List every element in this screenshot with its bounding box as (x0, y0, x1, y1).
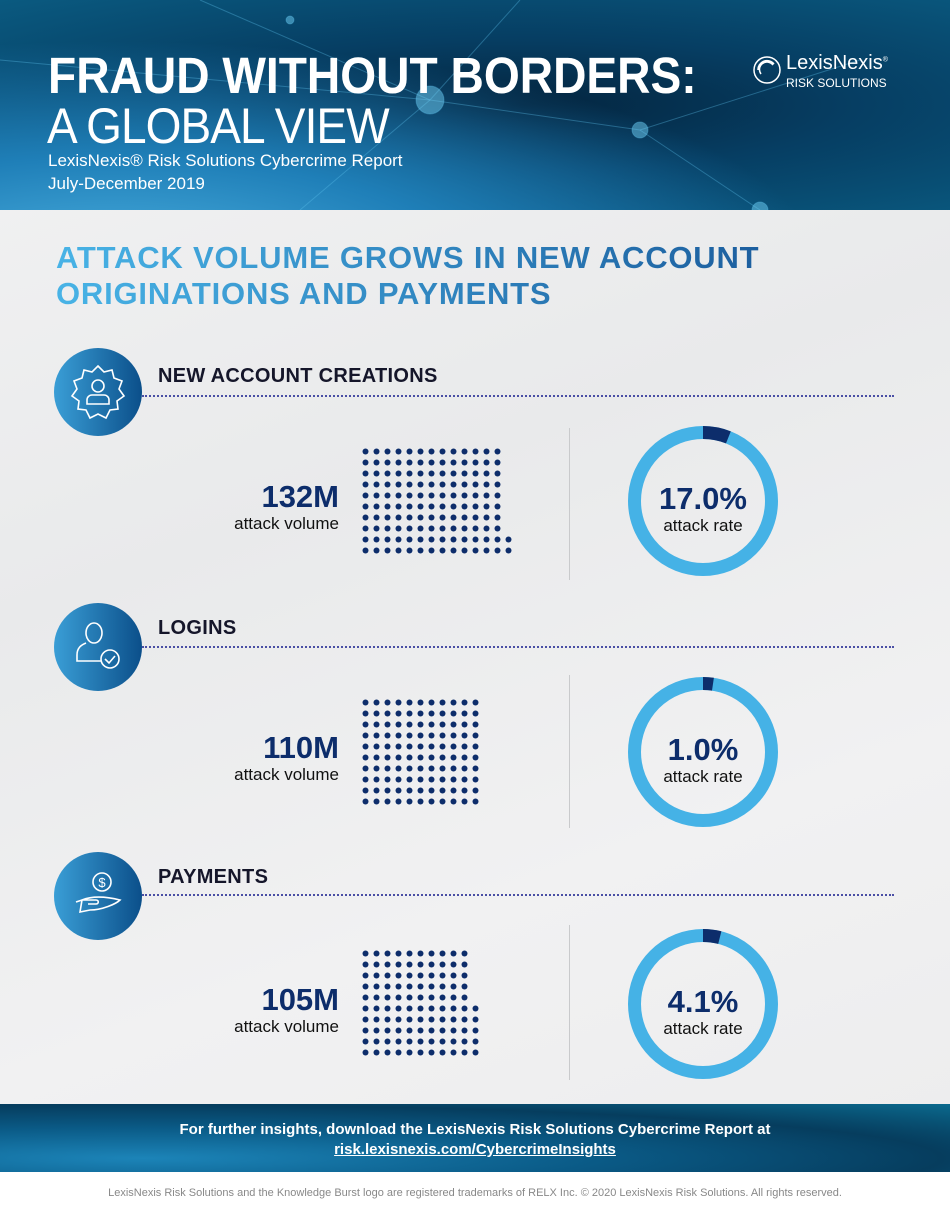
copyright: LexisNexis Risk Solutions and the Knowledge Burst logo are registered trademarks of RELX Inc. © 2020 LexisNexis Risk Solutions. All rights reserved. (108, 1187, 842, 1199)
report info: July-December 2019 (48, 174, 205, 193)
rate 1.0%: 1.0% (668, 732, 738, 767)
rate 17.0%: 17.0% (659, 481, 747, 516)
stat: 105M (234, 982, 339, 1036)
report info: LexisNexis® Risk Solutions Cybercrime Report (48, 151, 403, 170)
icon: new account (54, 348, 142, 436)
header banner (0, 0, 950, 210)
rate 4.1% (663, 984, 743, 1038)
rate 17.0% (659, 481, 747, 535)
dot grid 3 (362, 950, 478, 1056)
rate 17.0%: attack rate (663, 516, 743, 535)
subtitle: A GLOBAL VIEW (47, 98, 389, 154)
rate 4.1%: 4.1% (668, 984, 738, 1019)
heading: new account creations: NEW ACCOUNT CREATIONS (158, 365, 438, 387)
logo: RISK SOLUTIONS (786, 76, 887, 90)
footer banner (0, 1104, 950, 1172)
logo: LexisNexis® (786, 52, 888, 74)
stat: 132M: attack volume (234, 514, 339, 533)
title: FRAUD WITHOUT BORDERS: (48, 47, 697, 104)
ring 1 (628, 426, 778, 576)
dot grid 2 (362, 700, 478, 804)
copyright (0, 1186, 950, 1205)
rate 1.0% (663, 732, 743, 786)
stat: 110M: attack volume (234, 765, 339, 784)
ring 3 (628, 929, 778, 1079)
stat: 105M: attack volume (234, 1017, 339, 1036)
section heading: ATTACK VOLUME GROWS IN NEW ACCOUNT (56, 240, 759, 275)
logo (753, 52, 888, 90)
stat: 132M (234, 479, 339, 533)
section heading: ORIGINATIONS AND PAYMENTS (56, 276, 551, 311)
ring 2 (628, 677, 778, 827)
footer banner: For further insights, download the LexisNexis Risk Solutions Cybercrime Report at (180, 1121, 770, 1138)
stat: 105M: 105M (261, 982, 339, 1017)
rate 4.1%: attack rate (663, 1019, 743, 1038)
heading: logins: LOGINS (158, 617, 236, 639)
dot grid 1 (362, 448, 512, 554)
section heading (56, 240, 759, 312)
icon: payments: $ (98, 875, 106, 890)
rate 1.0%: attack rate (663, 767, 743, 786)
icon: logins (54, 603, 142, 691)
stat: 110M: 110M (263, 730, 339, 765)
stat: 132M: 132M (261, 479, 339, 514)
icon: payments (54, 852, 142, 940)
footer banner: risk.lexisnexis.com/CybercrimeInsights (334, 1141, 616, 1158)
heading: payments: PAYMENTS (158, 866, 268, 888)
stat: 110M (234, 730, 339, 784)
report info (48, 151, 403, 193)
